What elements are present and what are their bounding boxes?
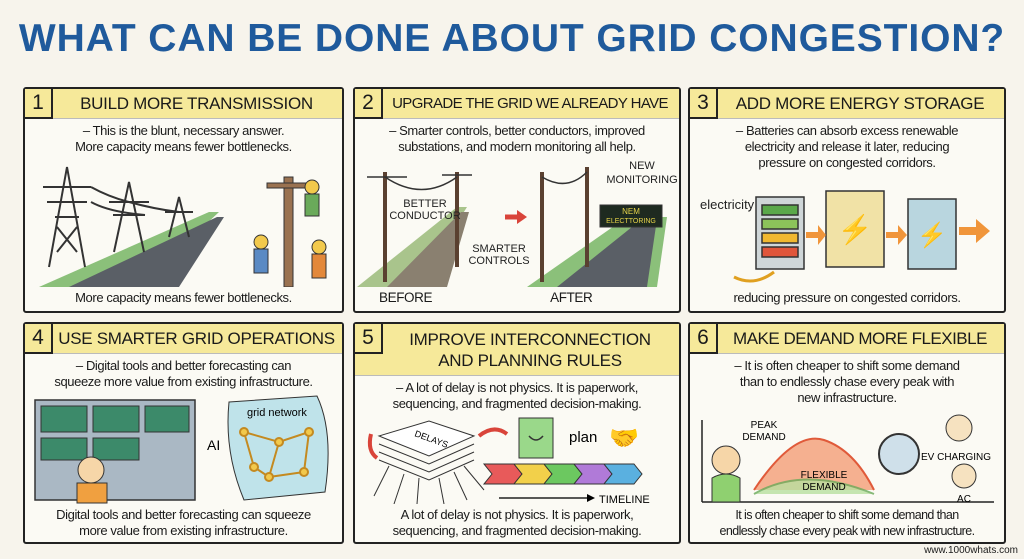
heading 2: UPGRADE THE GRID WE ALREADY HAVE [392, 95, 668, 112]
illustration: control room [34, 396, 329, 504]
subtext 4 [54, 358, 313, 389]
illustration: before/after: BETTER [403, 198, 447, 210]
illustration: before/after: ELECTTORING [606, 218, 656, 225]
illustration: batteries: electricity [700, 197, 755, 212]
illustration: demand chart: FLEXIBLE [801, 470, 848, 481]
illustration: demand chart: AC [957, 494, 971, 505]
subtext 1: – This is the blunt, necessary answer. [83, 123, 284, 138]
subtext 3: electricity and release it later, reducing [745, 139, 949, 154]
heading 2: 2 [362, 91, 374, 114]
heading 4: 4 [32, 326, 44, 349]
heading 3 [690, 89, 1004, 119]
heading 6: MAKE DEMAND MORE FLEXIBLE [733, 329, 987, 348]
panel: energy storage [688, 87, 1006, 313]
heading 5 [355, 324, 679, 376]
illustration: before/after: CONDUCTOR [389, 210, 461, 222]
heading 3: ADD MORE ENERGY STORAGE [736, 94, 984, 113]
subtext 1 [75, 123, 292, 154]
bottom text 1: More capacity means fewer bottlenecks. [75, 290, 292, 305]
subtext 5: – A lot of delay is not physics. It is paperwork, [396, 380, 638, 395]
subtext 5: sequencing, and fragmented decision-making. [393, 396, 641, 411]
illustration: batteries: ⚡ [838, 213, 872, 246]
subtext 4: – Digital tools and better forecasting can [76, 358, 291, 373]
bottom text 5: A lot of delay is not physics. It is paperwork, [401, 507, 633, 522]
illustration: before/after: NEW [629, 160, 655, 172]
heading 1: BUILD MORE TRANSMISSION [80, 94, 313, 113]
panel: flexible demand [688, 322, 1006, 544]
illustration: batteries: ⚡ [917, 221, 947, 249]
panel: smarter grid operations [23, 322, 344, 544]
bottom text 5: sequencing, and fragmented decision-making. [393, 523, 641, 538]
illustration: demand chart: PEAK [751, 420, 778, 431]
illustration: before/after: SMARTER [472, 243, 526, 255]
illustration: demand chart: DEMAND [742, 432, 786, 443]
bottom text 4: more value from existing infrastructure. [79, 523, 288, 538]
illustration: batteries [700, 190, 990, 282]
title: WHAT CAN BE DONE ABOUT GRID CONGESTION? [19, 17, 1005, 60]
heading 6 [690, 324, 1004, 354]
illustration: delays, plan, timeline: plan [569, 429, 597, 446]
subtext 5 [393, 380, 641, 411]
heading 2 [355, 89, 679, 119]
subtext 6: new infrastructure. [797, 390, 897, 405]
heading 5: AND PLANNING RULES [438, 351, 622, 370]
heading 4: USE SMARTER GRID OPERATIONS [58, 329, 335, 348]
subtext 6: than to endlessly chase every peak with [740, 374, 954, 389]
illustration: delays, plan, timeline: DELAYS [413, 428, 449, 450]
subtext 2: – Smarter controls, better conductors, improved [389, 123, 645, 138]
illustration: control room: grid network [247, 407, 307, 419]
bottom text 4: Digital tools and better forecasting can squeeze [56, 507, 311, 522]
illustration: before/after: NEM [622, 207, 640, 216]
panel: interconnection and planning [353, 322, 681, 544]
subtext 3: pressure on congested corridors. [758, 155, 936, 170]
subtext 3: – Batteries can absorb excess renewable [736, 123, 958, 138]
subtext 1: More capacity means fewer bottlenecks. [75, 139, 292, 154]
illustration: before/after: CONTROLS [468, 255, 530, 267]
heading 5: 5 [362, 326, 374, 349]
heading 3: 3 [697, 91, 709, 114]
illustration: delays, plan, timeline [368, 418, 650, 504]
subtext 2: substations, and modern monitoring all help. [398, 139, 636, 154]
bottom text 5 [393, 507, 641, 538]
heading 4 [25, 324, 342, 354]
illustration: control room: AI [207, 437, 220, 453]
panel: upgrade the grid [353, 87, 681, 313]
illustration: before/after [357, 160, 678, 287]
footer url: www.1000whats.com [924, 545, 1018, 556]
heading 5: IMPROVE INTERCONNECTION [409, 330, 651, 349]
bottom text 4 [56, 507, 311, 538]
subtext 4: squeeze more value from existing infrastructure. [54, 374, 313, 389]
illustration: demand chart: EV CHARGING [921, 452, 991, 463]
subtext 6: – It is often cheaper to shift some demand [734, 358, 960, 373]
subtext 2 [389, 123, 645, 154]
bottom text 3: reducing pressure on congested corridors. [733, 290, 961, 305]
bottom text 6 [720, 508, 974, 538]
illustration: towers and road [39, 166, 326, 287]
illustration: delays, plan, timeline: 🤝 [609, 425, 639, 452]
heading 1 [25, 89, 342, 119]
panel: build more transmission [23, 87, 344, 313]
illustration: demand chart [701, 414, 994, 505]
heading 6: 6 [697, 326, 709, 349]
subtext 3 [736, 123, 958, 170]
bottom text 6: It is often cheaper to shift some demand than [735, 508, 959, 522]
subtext 6 [734, 358, 960, 405]
heading 1: 1 [32, 91, 44, 114]
labels before/after: BEFORE AFTER [379, 290, 592, 305]
illustration: before/after: MONITORING [606, 174, 678, 186]
bottom text 6: endlessly chase every peak with new infrastructure. [720, 524, 974, 538]
illustration: demand chart: DEMAND [802, 482, 846, 493]
